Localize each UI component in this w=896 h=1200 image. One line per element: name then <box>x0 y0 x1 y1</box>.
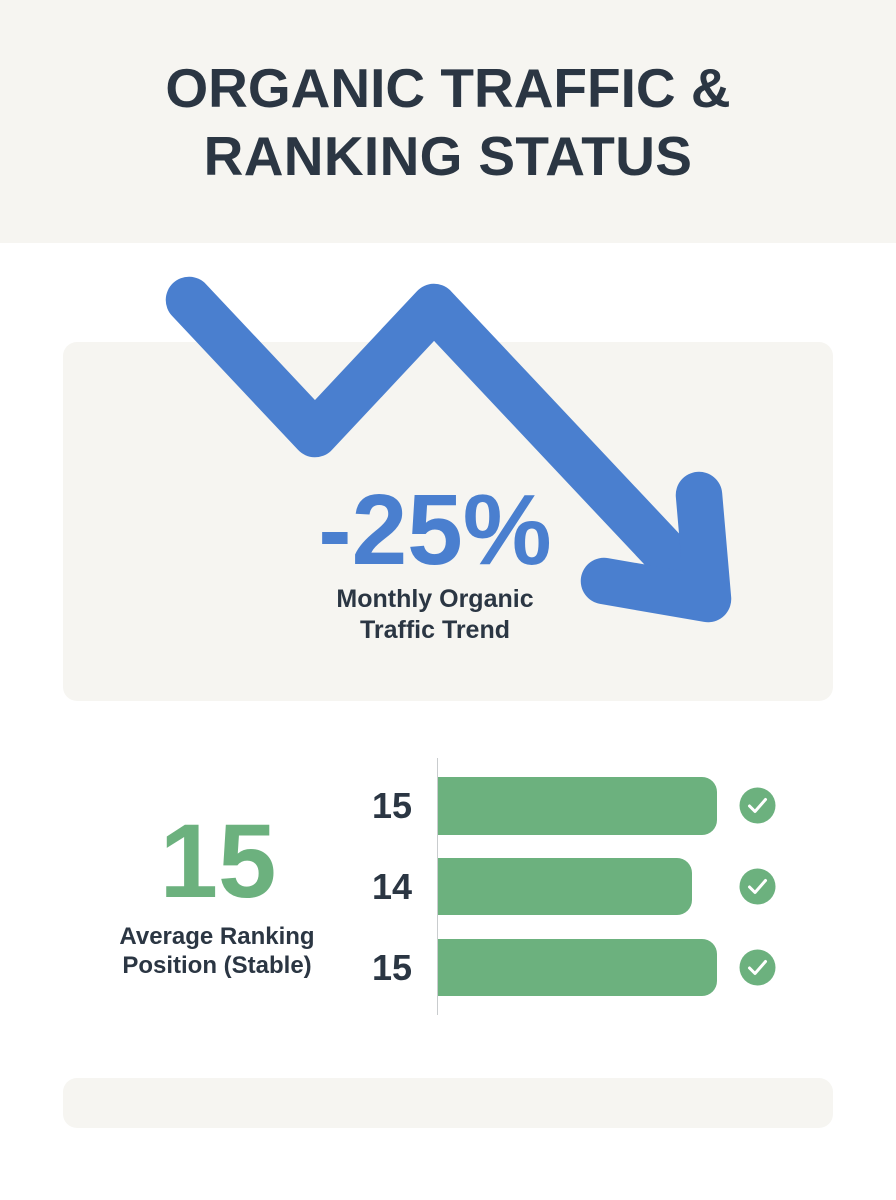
header band <box>0 0 896 243</box>
metric: traffic change: -25% <box>318 474 552 586</box>
bar 1 <box>438 777 717 835</box>
check icon 2 <box>740 868 776 904</box>
label: average ranking: Average Ranking <box>119 923 315 950</box>
row value 1: 15 <box>372 785 412 826</box>
label: traffic trend <box>336 585 534 644</box>
row value 2: 14 <box>372 866 412 907</box>
bar chart: ranking positions <box>372 758 776 1015</box>
metric: average ranking: 15 <box>160 803 276 920</box>
check icon 1 <box>740 788 776 824</box>
label: traffic trend: Traffic Trend <box>360 616 510 644</box>
title: ORGANIC TRAFFIC & <box>165 57 731 119</box>
title: RANKING STATUS <box>204 125 692 187</box>
axis line <box>437 758 438 1015</box>
title <box>165 57 731 187</box>
bar 3 <box>438 939 717 996</box>
row value 3: 15 <box>372 947 412 988</box>
label: average ranking <box>119 923 315 979</box>
label: traffic trend: Monthly Organic <box>336 585 534 613</box>
bar 2 <box>438 858 692 915</box>
check icon 3 <box>740 950 776 986</box>
panel: traffic trend <box>63 342 833 701</box>
footer panel <box>63 1078 833 1128</box>
label: average ranking: Position (Stable) <box>122 952 312 979</box>
